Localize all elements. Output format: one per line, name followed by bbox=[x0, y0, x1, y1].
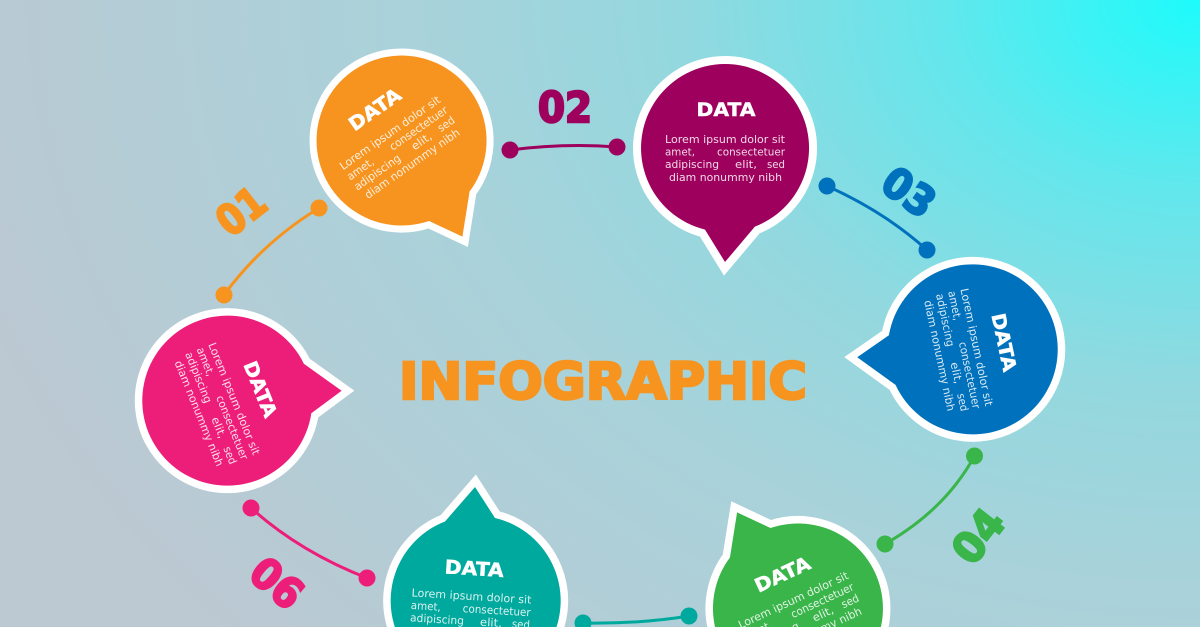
text block 02: elit, bbox=[735, 158, 757, 171]
number 01: 01 bbox=[207, 177, 276, 246]
bubble 01 orange bbox=[284, 23, 534, 282]
text block 04: consectetuer bbox=[789, 580, 856, 621]
bubble 03 blue bbox=[852, 259, 1063, 441]
text block 01: consectetuer bbox=[387, 103, 451, 153]
text block 04: DATA bbox=[751, 552, 814, 597]
text block 03: adipiscing bbox=[933, 292, 957, 348]
text block 05: amet, bbox=[410, 599, 441, 614]
number 02: 02 bbox=[538, 83, 592, 132]
text block 02: Lorem ipsum dolor sit bbox=[665, 133, 786, 146]
text block 03: sed bbox=[954, 392, 971, 412]
title: INFOGRAPHIC bbox=[399, 352, 807, 411]
text block 06: sed bbox=[220, 445, 239, 466]
text block 06: adipiscing bbox=[182, 350, 214, 405]
text block 05 bbox=[410, 554, 534, 627]
text block 06: consectetuer bbox=[213, 394, 251, 462]
text block 02: consectetuer bbox=[717, 146, 785, 159]
connector 03 bbox=[818, 178, 936, 258]
number 04: 04 bbox=[942, 499, 1015, 573]
text block 04: elit, bbox=[810, 604, 836, 625]
text block 06: diam nonummy nibh bbox=[172, 359, 226, 468]
text block 03: amet, bbox=[945, 290, 964, 322]
connector 01 bbox=[216, 200, 328, 304]
text block 06 bbox=[170, 329, 292, 472]
text block 01: DATA bbox=[345, 84, 406, 136]
text block 06: amet, bbox=[194, 345, 217, 378]
number 03: 03 bbox=[873, 157, 945, 228]
text block 02: adipiscing bbox=[665, 158, 719, 171]
text block 02: amet, bbox=[665, 146, 695, 159]
text block 03: Lorem ipsum dolor sit bbox=[957, 287, 995, 408]
text block 05: DATA bbox=[444, 556, 505, 582]
text block 01 bbox=[319, 67, 465, 204]
text block 01: Lorem ipsum dolor sit bbox=[337, 93, 444, 173]
text block 02: sed bbox=[767, 158, 785, 171]
bubble 04 green bbox=[666, 467, 915, 627]
text block 05: consectetuer bbox=[462, 602, 531, 619]
bubble 02 maroon bbox=[641, 64, 809, 262]
text block 04 bbox=[723, 540, 867, 627]
bubble 05 teal bbox=[391, 487, 561, 627]
bubble 06 pink bbox=[136, 307, 349, 492]
connector 05 bbox=[574, 608, 698, 627]
text block 03: diam nonummy nibh bbox=[921, 299, 957, 412]
text block 06: Lorem ipsum dolor sit bbox=[205, 341, 263, 458]
text block 01: diam nonummy nibh bbox=[362, 126, 462, 202]
connector 06 bbox=[242, 500, 376, 586]
text block 03 bbox=[920, 281, 1027, 416]
text block 01: amet, bbox=[344, 155, 377, 183]
connector 02 bbox=[502, 138, 626, 158]
text block 03: elit, bbox=[948, 361, 965, 385]
text block 05: Lorem ipsum dolor sit bbox=[411, 586, 532, 607]
number 06: 06 bbox=[240, 547, 313, 620]
text block 06: elit, bbox=[208, 415, 229, 440]
text block 06: DATA bbox=[239, 358, 281, 421]
text block 04: sed bbox=[839, 592, 861, 611]
text block 03: DATA bbox=[987, 311, 1020, 374]
text block 01: elit, bbox=[409, 130, 434, 153]
text block 02: DATA bbox=[696, 99, 756, 121]
text block 03: consectetuer bbox=[956, 341, 983, 410]
text block 02: diam nonummy nibh bbox=[669, 171, 782, 184]
connector 04 bbox=[876, 448, 983, 552]
text block 01: sed bbox=[435, 114, 457, 135]
text block 02 bbox=[665, 99, 786, 184]
text block 01: adipiscing bbox=[352, 152, 403, 193]
